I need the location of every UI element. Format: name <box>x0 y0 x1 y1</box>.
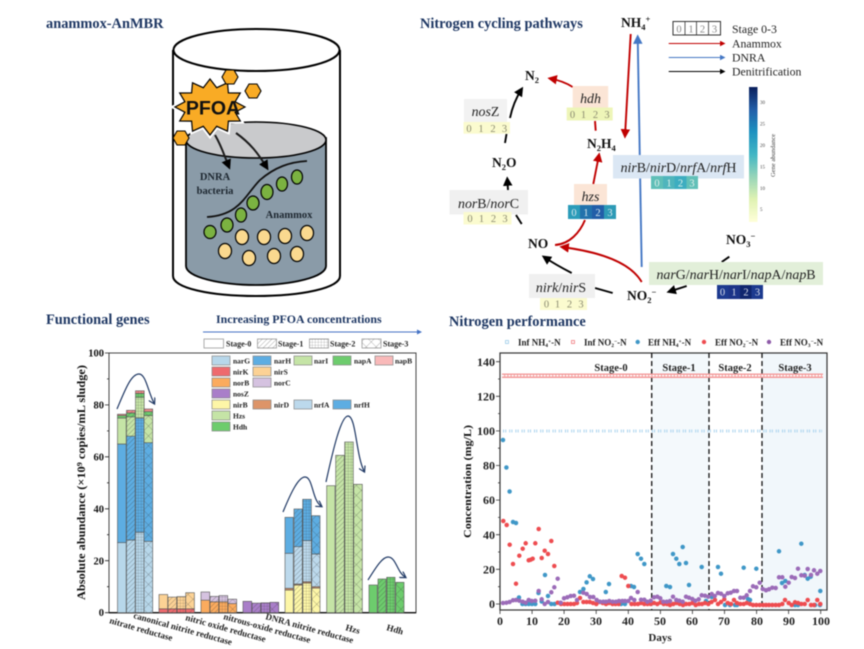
gene box: norB/norC <box>450 190 528 225</box>
bars: nitrous-oxide reductase <box>243 601 279 613</box>
stage box: 1 <box>688 24 694 36</box>
gene box: nirk/nirS: nirk/nirS <box>536 281 586 296</box>
gene box: nosZ <box>464 99 510 135</box>
gene box: narG/narH/narI/napA/napB: 2 <box>743 288 749 298</box>
x-axis category labels: canonical nitrite reductase <box>132 610 233 647</box>
legend: nitrogen species: + <box>548 339 551 345</box>
gene box: nosZ: 0 <box>466 124 472 135</box>
title: Functional genes: Functional genes <box>46 312 150 328</box>
gene box: nirB/nirD/nrfA/nrfH: 1 <box>666 178 672 190</box>
gene legend: nrfA <box>314 400 330 410</box>
gene box: narG/narH/narI/napA/napB <box>649 262 823 299</box>
y-axis tick labels: 80 <box>94 400 104 412</box>
stage box: 3 <box>712 24 717 36</box>
stage box <box>673 22 777 36</box>
gene box: hdh: 3 <box>604 110 610 121</box>
x-axis category labels: nitrous-oxide reductase <box>222 611 312 645</box>
x-axis category labels: Hzs <box>344 622 362 636</box>
series: effluent NH4 <box>503 440 820 605</box>
gene legend: nirD <box>274 400 290 410</box>
legend: nitrogen species: 4 <box>545 343 548 349</box>
gene box: norB/norC: norB/norC <box>458 197 519 212</box>
x tick labels: 0 <box>497 614 503 628</box>
y tick labels: 0 <box>489 597 495 611</box>
red anammox arrows <box>550 34 642 282</box>
gene box: hzs: 3 <box>607 208 613 219</box>
x tick labels: 80 <box>751 614 763 628</box>
colorbar: gene abundance <box>749 87 777 222</box>
bars: canonical nitrite reductase <box>159 593 194 613</box>
node: N2: N <box>525 68 535 83</box>
gene legend: nosZ <box>233 390 249 398</box>
colorbar: gene abundance: 20 <box>760 144 766 149</box>
y tick labels: 140 <box>477 355 495 369</box>
x tick labels: 90 <box>783 614 795 628</box>
y tick labels: 60 <box>483 493 495 507</box>
node: NO3-: 3 <box>746 239 750 249</box>
gene box: nirk/nirS <box>529 274 595 310</box>
node: N2O: O <box>506 155 517 170</box>
gene box: nirB/nirD/nrfA/nrfH: 0 <box>654 178 660 190</box>
bars: DNRA nitrite reductase <box>285 499 320 613</box>
y-axis tick labels: 100 <box>88 348 104 360</box>
gene box: hdh <box>567 86 613 121</box>
gene box: nosZ: 3 <box>502 124 507 135</box>
gene box: hdh: hdh <box>580 92 601 107</box>
legend: stage patterns: Stage-0 <box>226 340 251 348</box>
gene legend: norC <box>274 378 291 388</box>
node: N2O: N <box>492 155 502 170</box>
gene legend: napA <box>354 356 372 366</box>
x tick labels: 60 <box>686 614 698 628</box>
stage dividers <box>652 353 762 610</box>
x tick labels <box>497 614 830 628</box>
node: N2H4: 4 <box>612 143 617 153</box>
x-axis category labels: DNRA nitrite reductase <box>264 611 355 645</box>
stage shading <box>652 353 709 610</box>
gene legend: narG <box>233 356 250 366</box>
node: N2H4: 2 <box>597 143 601 153</box>
outer vessel <box>173 50 340 296</box>
x tick labels: 40 <box>622 614 634 628</box>
diagram: nitrogen cycling network <box>450 14 823 310</box>
legend: nitrogen species: 2 <box>611 343 614 349</box>
colorbar: gene abundance: 30 <box>760 101 766 106</box>
gene box: hzs: 2 <box>595 208 601 219</box>
colorbar: gene abundance: 5 <box>760 208 763 213</box>
gene box: nirk/nirS: 1 <box>555 300 560 310</box>
legend: nitrogen species: Inf NH <box>518 338 545 348</box>
gene legend <box>212 356 412 432</box>
gene legend: norB <box>233 378 249 388</box>
PFOA burst icon <box>175 79 245 135</box>
blue DNRA arrow <box>638 37 642 267</box>
y tick labels: 40 <box>483 528 495 542</box>
x-axis title: Days <box>648 632 672 644</box>
yellow cells <box>218 226 314 266</box>
node: N2O: 2 <box>502 162 506 172</box>
node: NO2-: 2 <box>647 295 652 305</box>
stage labels: Stage-2 <box>718 363 752 374</box>
gene legend: nrfH <box>354 400 370 410</box>
Denitrification key: Denitrification <box>732 64 802 78</box>
y-axis tick labels: 20 <box>94 556 104 568</box>
gene box: narG/narH/narI/napA/napB: 3 <box>755 288 760 298</box>
x-axis category labels: nitrate reductase <box>108 615 174 643</box>
axes frame <box>109 353 416 613</box>
gene box: norB/norC: 1 <box>479 214 484 225</box>
y-axis tick labels: 60 <box>94 452 104 464</box>
gene box: hdh: 1 <box>581 110 586 121</box>
y-axis title: Absolute abundance (×10 <box>76 475 88 600</box>
x-axis category labels <box>108 610 405 647</box>
gene box: hzs: hzs <box>582 190 599 205</box>
gene box: hzs <box>568 184 616 219</box>
illustration: reactor cylinder <box>173 29 340 296</box>
PFOA hexagon particles <box>173 70 261 145</box>
gene legend: nirK <box>233 368 249 376</box>
y-axis title: 9 <box>75 462 84 466</box>
series: influent NH4 <box>503 430 822 432</box>
legend: pathway key <box>669 22 802 78</box>
node: NO: NO <box>528 236 548 251</box>
Anammox key: Anammox <box>732 36 782 50</box>
bars: Hzs <box>327 442 362 613</box>
legend: nitrogen species: 4 <box>676 343 679 349</box>
x tick labels: 100 <box>812 614 830 628</box>
gene box: nosZ: 1 <box>478 124 484 135</box>
gene box: hzs: 0 <box>571 208 577 219</box>
y tick labels: 100 <box>477 424 495 438</box>
y tick labels: 80 <box>483 458 495 472</box>
series: effluent NO3 <box>503 569 820 604</box>
title: Nitrogen performance: Nitrogen performance <box>449 314 586 330</box>
legend: nitrogen species: Eff NO <box>715 338 743 348</box>
node: NO2-: − <box>652 287 656 297</box>
legend: nitrogen species: 3 <box>808 343 811 349</box>
colorbar: gene abundance: 10 <box>760 187 766 192</box>
gene box: hdh: 2 <box>593 110 598 121</box>
title: Nitrogen cycling pathways: Nitrogen cycling pathways <box>420 16 583 32</box>
green cells <box>204 170 302 238</box>
gene box: norB/norC: 2 <box>491 214 496 225</box>
gene box: nirk/nirS: 0 <box>544 300 549 310</box>
node: N2H4: N <box>587 136 597 151</box>
legend: nitrogen species: Eff NO <box>780 338 808 348</box>
gene box: hzs: 1 <box>583 208 589 219</box>
bars: nitric oxide reductase <box>201 592 237 613</box>
legend: nitrogen species: + <box>678 339 682 345</box>
node: NH4+: NH <box>621 15 641 30</box>
inner sludge body <box>186 138 326 285</box>
node: NH4+: + <box>646 14 650 24</box>
black denitrification arrows <box>505 89 729 293</box>
legend: nitrogen species: -N <box>551 338 561 348</box>
legend: nitrogen species: − <box>746 339 749 345</box>
legend: nitrogen species: Eff NH <box>648 338 676 348</box>
gene legend: Hzs <box>233 412 245 420</box>
gene box: nirB/nirD/nrfA/nrfH: 2 <box>678 178 683 190</box>
series: effluent NO2 <box>503 521 820 605</box>
y-axis title: Concentration (mg/L) <box>462 425 474 538</box>
y-axis tick labels <box>88 348 104 619</box>
gene box: norB/norC: 3 <box>502 214 508 225</box>
gene box: nirB/nirD/nrfA/nrfH: nirB/nirD/nrfA/nrfH <box>621 161 736 176</box>
stage box: Stage 0-3 <box>732 22 777 36</box>
y-axis tick labels: 0 <box>99 608 104 619</box>
PFOA burst icon: PFOA <box>186 98 240 120</box>
legend: nitrogen species: − <box>810 339 814 345</box>
gene legend: narI <box>314 356 328 366</box>
S-curve divider <box>207 161 307 217</box>
gene legend: nirS <box>274 368 288 376</box>
label: DNRA bacteria: DNRA <box>200 172 231 183</box>
x tick labels: 20 <box>558 614 570 628</box>
x tick labels: 50 <box>654 614 666 628</box>
legend: stage patterns: Stage-1 <box>278 340 303 348</box>
gene box: narG/narH/narI/napA/napB: narG/narH/narI/napA/napB <box>656 268 816 283</box>
node: NO3-: NO <box>726 232 746 247</box>
stage labels: Stage-3 <box>778 363 812 374</box>
legend: stage patterns <box>204 339 408 348</box>
trend arrows <box>117 374 405 580</box>
y tick labels: 120 <box>477 390 495 404</box>
colorbar: gene abundance: Gene abundance <box>770 134 777 177</box>
title: anammox-AnMBR: anammox-AnMBR <box>46 16 164 32</box>
colorbar: gene abundance: 15 <box>760 166 766 170</box>
gene legend: Hdh <box>233 422 248 432</box>
node: N2H4: H <box>601 136 612 151</box>
bars: nitrate reductase <box>118 391 153 613</box>
y-axis title: copies/mL sludge) <box>76 365 88 462</box>
stage labels <box>594 363 812 374</box>
node: NH4+: 4 <box>641 22 646 32</box>
colorbar: gene abundance: 25 <box>760 122 766 128</box>
chart: nitrogen concentration scatter <box>462 353 830 644</box>
gene legend: nirB <box>233 400 248 410</box>
arrows into bacteria <box>215 133 267 168</box>
x-axis category labels: nitric oxide reductase <box>184 612 267 644</box>
gene box: norB/norC: 0 <box>467 214 473 225</box>
gene box: nosZ: 2 <box>490 124 496 135</box>
legend: nitrogen species: − <box>614 339 617 345</box>
legend: nitrogen species: -N <box>617 338 627 348</box>
gene legend: napB <box>395 356 412 366</box>
y tick labels: 20 <box>483 562 495 576</box>
x tick labels: 70 <box>718 614 730 628</box>
legend: nitrogen species <box>506 338 824 349</box>
stage box: 2 <box>700 24 705 36</box>
chart: functional gene stacked bars <box>75 348 416 647</box>
node: NO3-: − <box>750 231 756 241</box>
legend: nitrogen species: -N <box>749 338 759 348</box>
x-axis category labels: Hdh <box>385 622 405 637</box>
callout: increasing PFOA arrow: Increasing PFOA concentrations <box>216 312 382 326</box>
legend: stage patterns: Stage-2 <box>330 340 355 348</box>
gene legend: narH <box>274 356 291 366</box>
gene box: narG/narH/narI/napA/napB: 1 <box>731 288 737 298</box>
gene box: nirB/nirD/nrfA/nrfH <box>613 155 744 190</box>
gene box: nirB/nirD/nrfA/nrfH: 3 <box>689 178 695 190</box>
y tick labels <box>477 355 495 611</box>
node: NO2-: NO <box>627 288 647 303</box>
legend: nitrogen species: 2 <box>743 343 746 349</box>
y-axis tick labels: 40 <box>94 504 104 516</box>
legend: nitrogen species: -N <box>814 338 824 348</box>
illustration: reactor cylinder: bacteria <box>197 186 234 197</box>
DNRA key: DNRA <box>732 50 766 64</box>
legend: nitrogen species: -N <box>682 338 692 348</box>
x tick labels: 10 <box>526 614 538 628</box>
x tick labels: 30 <box>590 614 602 628</box>
axes frame <box>500 353 827 610</box>
series: influent NO2 <box>502 373 823 378</box>
stage labels: Stage-1 <box>662 363 696 374</box>
legend: nitrogen species: Inf NO <box>584 338 611 348</box>
bars: Hdh <box>369 577 404 613</box>
gene box: narG/narH/narI/napA/napB: 0 <box>720 288 725 298</box>
label: Anammox: Anammox <box>266 210 313 221</box>
stage box: 0 <box>676 24 682 36</box>
node: N2: 2 <box>535 75 539 85</box>
gene box: nirk/nirS: 3 <box>578 300 584 310</box>
gene box: nirk/nirS: 2 <box>567 300 572 310</box>
gene box: nosZ: nosZ <box>472 105 499 120</box>
legend: stage patterns: Stage-3 <box>383 340 408 348</box>
stage labels: Stage-0 <box>594 363 628 374</box>
gene box: hdh: 0 <box>570 110 575 121</box>
